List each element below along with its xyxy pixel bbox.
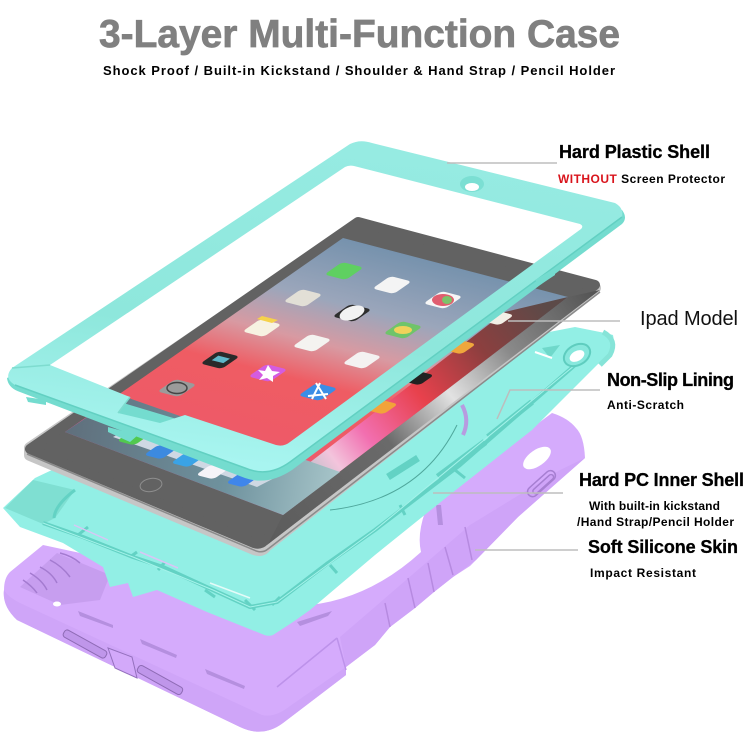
label: impact resistant: Impact Resistant	[590, 566, 696, 580]
app icons	[117, 262, 514, 487]
label: ipad model: Ipad Model	[640, 308, 738, 330]
right bezel reflection	[268, 290, 600, 544]
camera hole	[460, 176, 484, 192]
home button	[139, 477, 163, 493]
leader line: non-slip lining	[497, 390, 600, 419]
leader line: hard plastic shell	[447, 162, 557, 164]
shell corner well	[5, 480, 75, 524]
white crescent gap	[298, 512, 425, 606]
leader line: ipad model	[508, 320, 620, 322]
label: hard plastic shell: Hard Plastic Shell	[559, 142, 710, 162]
layer: tablet	[27, 222, 600, 552]
frame tabs	[26, 268, 555, 442]
rib structure	[43, 365, 575, 610]
label: hard pc inner shell: Hard PC Inner Shell	[579, 470, 744, 490]
screen area right of frame	[283, 297, 568, 515]
kickstand ring	[330, 425, 457, 510]
leader line: hard pc inner shell	[433, 492, 563, 494]
label: kickstand note: With built-in kickstand	[589, 499, 720, 513]
charging port	[108, 648, 137, 678]
layer: purple soft silicone skin	[4, 413, 585, 732]
white strap gap	[519, 442, 555, 474]
side switch	[526, 469, 557, 499]
screen	[65, 238, 568, 515]
label: soft silicone skin: Soft Silicone Skin	[588, 537, 738, 557]
title: 3-Layer Multi-Function Case	[99, 13, 620, 56]
label: strap and pencil holder note: /Hand Strap/Pencil Holder	[577, 515, 734, 529]
speaker grilles	[62, 629, 184, 696]
layer: teal hard plastic shell frame	[7, 141, 625, 481]
purple ring edge	[462, 405, 466, 435]
layer: teal inner shell	[3, 327, 615, 636]
label: non-slip lining: Non-Slip Lining	[607, 370, 734, 390]
app dock	[113, 420, 290, 487]
subtitle: Shock Proof / Built-in Kickstand / Shoulder & Hand Strap / Pencil Holder	[103, 63, 615, 78]
leader line: soft silicone skin	[475, 549, 578, 551]
corner hook	[600, 332, 613, 365]
screen strip below frame	[65, 395, 340, 515]
bottom buttons	[78, 505, 443, 689]
label: screen protector note: WITHOUT Screen Protector	[558, 172, 725, 186]
label: anti-scratch: Anti-Scratch	[607, 398, 684, 412]
mounting ring	[560, 339, 594, 371]
